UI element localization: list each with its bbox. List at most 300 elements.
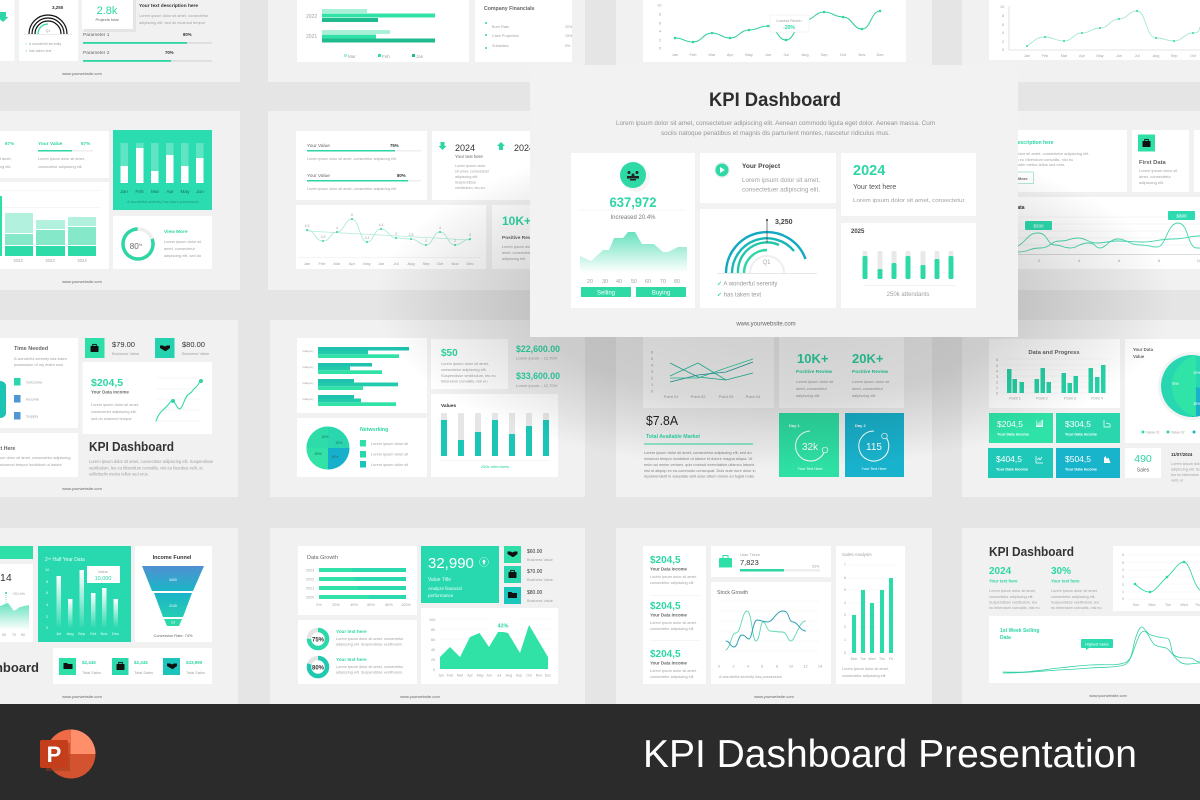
panel: 2025 attendants bars: 250k attendants [887,292,929,298]
panel: main kpi card: 80 [674,279,680,285]
panel: half year teal chart: Aug [66,631,74,636]
slide: row 4 right: eu bibendum convallis, nisi eu [989,606,1040,610]
panel: income list: $204,5 [650,649,681,660]
panel: data growth: 2023 [306,568,314,572]
panel: area chart: 60 [431,638,435,642]
panel: sales analysis: 7 [844,563,846,567]
panel: day 1 tile: Day 1 [789,423,800,428]
panel: income list: Your Data Income [650,612,688,618]
panel: area chart [421,608,558,684]
panel: 2024: 2024 [853,163,885,179]
slide: top row horizontal bars: 15% [565,34,573,38]
slide: row 3 market data [616,320,932,497]
panel: horizontal bar categories: Category [302,381,314,385]
slide: row 4 right: eu bibendum convallis, nisi eu [1051,606,1102,610]
slide: row 4 middle: $70.00 [527,569,543,575]
panel: progress donuts: 80% [312,666,325,672]
panel: user three: 7,823 [740,558,759,567]
slide: top row line chart lowest reach: 8 [659,12,662,16]
slide: row 4 right: Your text here [1051,578,1080,584]
panel: main kpi card [571,153,695,308]
panel: sales analysis: Mon [851,657,857,661]
slide: row 2 middle: Aug [407,261,415,266]
slide: top row left fragment: Lorem ipsum dolor sit amet, consectetur [139,13,209,18]
slide: row 3 left: Lorem ipsum dolor sit amet, consectetur adipiscing elit. Suspendisse [89,459,214,464]
panel: half year teal chart: Half Year Data [51,557,85,563]
slide: row 2 middle: 2024 [455,143,475,153]
panel: income funnel: 13 [171,620,175,624]
slide: top row left fragment: ✓ A wonderful serenity [25,42,61,46]
panel: sales analysis: 5 [844,588,846,592]
panel: teal bar chart card: Jun [196,189,204,195]
slide: row 4 right: KPI Dashboard [989,544,1074,559]
slide: row 2 right: Lorem ipsum dolor sit [1139,168,1178,173]
slide: row 2 middle: 2,8 [409,233,413,237]
panel: line chart sun to thu: 5 [1122,561,1124,565]
slide: top row left fragment: Your text description here [139,3,198,9]
slide: row 2 middle: 2024 [514,143,534,153]
panel: stock growth chart: 4 [747,664,749,668]
panel: half year teal chart: 4 [46,603,48,607]
slide: row 3 left: $204,5 [91,377,123,389]
panel: half year teal chart: Value [98,569,109,574]
slide: row 3 right data and progress: 2 [996,380,998,384]
panel: area chart: Jun [486,674,492,678]
panel: half year teal chart: Nov [100,631,108,636]
slide: row 2 middle: Your text here [455,154,483,159]
slide: row 2 right: 2 [1038,258,1041,263]
slide: row 2 middle: 80% [397,173,406,178]
panel: income tile 204,5 [989,413,1053,443]
panel: half year teal chart: 10,000 [95,576,111,582]
panel: gauge chart: 3,250 [775,219,793,226]
panel: networking pie: 25% [314,452,322,456]
slide: top row line chart lowest reach: Apr [727,52,734,57]
slide: row 4 left: 80 [21,633,25,637]
slide: row 3 left: sollicitudin metus tellus sed eros. [89,472,149,476]
panel: line chart sun to thu [1113,546,1200,611]
slide: row 3 right data and progress: 5 [996,364,998,368]
panel: donut 80 percent card: View More [164,229,188,235]
panel: progress donuts [298,620,417,684]
panel: stock growth chart: A wonderful serenity has possession [719,674,782,679]
slide: row 3 left: Business Value [182,351,210,356]
panel: stock growth chart: 12 [803,664,808,668]
panel: total sales strip: Total Sales [134,670,153,675]
panel: stock growth chart: 0 [718,664,720,668]
slide: top row line chart lowest reach: Feb [690,52,697,57]
slide: row 2 middle: 2 [425,239,427,243]
slide: row 2 left: 2023 [45,258,55,263]
panel: line chart sun to thu: Mon [1148,603,1156,607]
slide: row 3 left: www.yourwebsite.com [62,486,102,491]
slide: row 4 left [0,528,238,704]
panel: sales analysis: Lorem ipsum dolor sit amet, [842,667,889,671]
panel: center slide KPI Dashboard [530,65,1018,337]
slide: top row line chart lowest reach: Mar [709,52,716,57]
slide: row 4 right: 2024 [989,566,1012,577]
subtitle text: sociis natoque penatibus et magnis dis parturient montes, nascetur ridiculus mus. [661,130,890,137]
panel: area chart: 80 [431,628,435,632]
slide: row 2 middle: 75% [390,143,399,148]
slide: row 3 middle: $50 [441,348,458,359]
slide: row 2 middle: 10K+ [502,214,531,228]
slide: row 3 market data: 6 [651,350,654,354]
slide: top row left fragment: Projects total [95,17,119,22]
slide: row 4 right: 30% [1051,566,1071,577]
slide: row 2 right: Lorem ipsum dolor sit amet, consectetur adipiscing elit. [992,151,1089,156]
panel: area chart: Nov [536,674,542,678]
panel: data growth: 2021 [306,586,314,590]
slide: row 4 middle: www.yourwebsite.com [400,694,440,699]
slide: row 3 market data: Point 02 [691,394,706,399]
slide: row 3 right data and progress: Point 3 [1064,396,1076,400]
panel: your project: consectetuer adipiscing elit. [742,188,820,194]
panel: teal bar chart card [113,130,212,210]
panel: day 1 tile [779,413,839,477]
panel: horizontal bar categories: Category [302,365,314,369]
panel: line chart sun to thu: 0 [1122,597,1124,601]
panel: sales analysis: consectetur adipiscing elit [842,674,886,678]
panel: 2024: Your text here [853,184,896,191]
panel: half year teal chart: nd [48,556,51,560]
slide: top row horizontal bars: Jan [416,54,424,59]
slide: row 3 left: $79.00 [112,340,135,349]
subtitle text [616,120,935,137]
slide: row 2 middle: Mar [334,261,341,266]
panel: gauge chart: ✓ A wonderful serenity [717,282,777,288]
panel: line chart sun to thu: Wed [1180,603,1188,607]
panel: income tile 204,5: Your Data Income [997,432,1029,436]
slide: row 2 left: consectetur adipiscing elit. [38,165,83,169]
slide: row 4 right [962,528,1200,704]
slide: row 3 market data: Point 03 [719,394,734,399]
panel: donut 80 percent card [113,216,212,269]
panel: line chart sun to thu: 6 [1122,553,1124,557]
slide: row 3 middle: $22,600.00 [516,344,560,354]
slide: row 3 right data and progress: leo eu bibendum [1171,473,1199,477]
panel: gauge chart [700,209,836,308]
panel: income list: Lorem ipsum dolor sit amet, [650,621,697,625]
slide: top row horizontal bars: 2021 [306,34,317,40]
slide: row 3 right data and progress: 3 [996,375,998,379]
panel: day 1 tile: 32k [802,442,819,453]
panel: income funnel [135,546,212,642]
panel: horizontal bar categories [297,338,427,413]
panel: day 2 tile: Your Text Here [862,467,886,471]
gauge arcs [726,232,806,273]
panel: your data value pie: Value 02 [1171,430,1185,434]
panel: income funnel: 2140 [169,604,177,608]
slide: row 2 middle: Lorem ipsum dolor [455,164,486,168]
panel: half year teal chart: Dec [112,631,119,636]
slide: row 2 left: www.yourwebsite.com [62,279,102,284]
slide: top row horizontal bars: Subsidies [492,44,509,48]
slide: row 3 market data: $7.8A [646,413,678,428]
slide: top row left fragment: adipiscing elit, sed do eiusmod tempor [139,20,206,25]
panel: data growth: 80% [385,603,393,607]
slide: row 3 market data: nisi ut aliquip ex ea commodo consequat. Duis aute irure dolor in [644,468,756,473]
panel: income tile 304,5: $304,5 [1065,419,1091,429]
slide: row 3 right data and progress [962,320,1200,497]
slide: row 3 market data: 2 [651,376,654,380]
panel: your project: Lorem ipsum dolor sit amet, [742,178,820,184]
slide: top row left fragment: Parameter 1 [83,32,110,38]
slide: row 3 middle: Lorem ipsum – 12,70% [516,356,558,360]
panel: progress donuts: Your text here [336,629,367,634]
slide: row 4 middle: $80.00 [527,590,543,596]
slide: top row line chart lowest reach: May [745,52,753,57]
slide: row 3 market data: 4 [651,362,654,368]
panel: data growth: 20% [332,603,340,607]
panel: area chart: 20 [431,658,435,662]
slide: top row line chart lowest reach: Dec [876,52,884,57]
panel: teal bar chart card: Jan [120,189,128,195]
panel: networking pie: Lorem ipsum dolor sit [371,452,409,456]
slide: top row line chart lowest reach: Jul [783,52,789,57]
panel: income list: Lorem ipsum dolor sit amet, [650,575,697,579]
panel: half year teal chart: 2 [45,557,48,563]
slide: row 3 right data and progress: 6 [996,358,998,362]
panel: progress donuts: 75% [312,638,325,644]
slide: top row right line chart: Jun [1116,54,1122,58]
slide: row 3 left: Business Value [112,351,140,356]
slide: top row right line chart: 10 [1000,5,1004,9]
slide: row 3 left: possession of my entire soul [14,362,63,367]
slide: row 4 stock growth: www.yourwebsite.com [754,694,794,699]
panel: data growth [298,546,417,615]
slide: row 3 market data: 10K+ [797,351,829,366]
slide: row 3 middle: Lorem ipsum dolor sit amet, [441,361,489,366]
panel: data growth: 0% [316,603,322,607]
slide: top row horizontal bars: 5% [565,44,571,48]
panel: value title teal card [421,546,499,603]
slide: row 3 right data and progress: adipiscing elit. Su [1171,468,1200,472]
slide: row 2 right: $800 [1176,214,1187,218]
panel: donut 80 percent card: adipiscing elit, sed do [164,253,201,258]
slide: row 2 left: Your Value [38,141,63,147]
slide: top row line chart lowest reach: 4 [659,28,662,34]
panel: main kpi card: Increased 20.4% [610,215,656,221]
slide: row 3 left: Lorem ipsum dolor sit amet, [91,402,139,407]
panel: area chart: Aug [506,674,512,678]
slide: top row line chart lowest reach: Aug [801,52,809,57]
slide: row 2 middle: amet, consectetur [502,251,533,255]
panel: sales analysis: 0 [844,651,846,655]
panel: income tile 404,5: Your Data Income [996,468,1028,472]
slide: row 2 right: 4 [1078,258,1081,263]
slide: row 3 left: vestibulum, leo eu bibendum convallis, nisi eu faucibus velit, or, [89,466,204,470]
slide: row 3 market data: Lorem ipsum dolor sit [796,379,834,384]
panel: donut 80 percent card: 80 [130,242,139,251]
slide: top row line chart lowest reach: -20% [783,25,795,31]
panel: area chart: 100 [429,618,435,622]
panel: networking pie: Lorem ipsum dolor sit [371,441,409,446]
slide: row 3 right data and progress: 1 [996,386,998,390]
panel: main kpi card: 20 [587,279,593,285]
panel: value title teal card: Analyze financial [428,586,462,591]
slide: row 3 right data and progress: 0 [996,392,998,396]
slide: row 3 left: $80.00 [182,340,205,349]
panel: stock growth chart [711,582,831,684]
panel: 2024: Lorem ipsum dolor sit amet, consectetur. [853,198,966,204]
slide: row 2 left: 67% [5,141,14,146]
slide: row 3 left: A wonderful serenity has taken [14,356,67,361]
slide: row 2 right: Bar Data [1004,205,1025,211]
panel: main kpi card: 50 [631,279,637,285]
panel: income tile 304,5 [1056,413,1120,443]
panel: networking pie: 20% [335,441,343,445]
panel: income list [643,546,706,684]
panel: income tile 404,5 [988,448,1053,478]
slide: top row right line chart: Mar [1061,54,1068,58]
panel: day 2 tile: 115 [866,442,882,453]
slide: row 2 middle: Apr [349,261,356,266]
panel: sales analysis: Sales Analysis [842,552,872,557]
panel: data growth: Data Growth [307,555,338,561]
slide: top row right line chart: Sep [1171,54,1177,58]
slide: row 3 market data: 5 [651,356,654,361]
slide: row 2 right: amet, consectetur [1139,174,1171,179]
slide: row 4 middle: Business Value [527,558,553,562]
panel: area chart: Jul [497,674,501,678]
slide: row 2 right: 8 [1158,258,1161,263]
slide: top row left fragment: Parameter 2 [83,50,110,56]
slide: top row right line chart [962,0,1200,82]
slide: row 3 middle: Suspendisse vestibulum, leo eu [441,373,496,378]
panel: area chart: May [477,674,484,678]
panel: area chart: Oct [526,674,532,678]
slide: row 2 left: 2024 [77,258,87,263]
panel: networking pie: Networking [360,427,388,433]
panel: your data value pie: Value [1133,354,1145,359]
slide: top row left fragment: 70% [165,50,174,55]
panel: main kpi card: 70 [660,279,666,285]
button: buying [636,287,686,297]
button: buying: Buying [652,290,670,296]
panel: progress donuts: adipiscing elit. Suspendisse vestibulum. [336,670,403,674]
panel: half year teal chart: Sep [78,631,86,636]
panel: 2025 attendants bars: 2025 [851,229,865,235]
slide: row 4 left: www.yourwebsite.com [62,694,102,699]
slide: row 4 left: +20.4% [12,592,26,596]
slide: top row left fragment: 3,250 [52,5,64,10]
panel: your project: Your Project [742,163,781,170]
panel: area chart: 40 [431,648,435,652]
slide: row 3 market data: reprehenderit in voluptate velit esse cillum dolore eu fugiat nulla [644,474,754,478]
panel: stock growth chart: 6 [761,664,763,668]
panel: income tile 504,5: Your Data Income [1065,468,1097,472]
panel: teal bar chart card: Apr [166,189,174,195]
panel: income tile 204,5: $204,5 [997,419,1023,429]
footer url: www.yourwebsite.com [735,322,796,328]
panel: total sales strip: Total Sales [186,670,205,675]
area chart [580,232,687,273]
slide: row 2 middle: Jul [393,261,399,266]
slide: row 3 right data and progress: Point 1 [1009,396,1021,400]
slide: row 2 middle: 2,5 [321,235,325,239]
slide: row 3 left: consectetur adipiscing elit, [91,409,137,414]
slide: row 2 middle: Suspendisse [455,180,476,184]
slide: row 3 market data: 20K+ [852,351,884,366]
slide: row 4 middle [270,528,585,704]
slide: row 4 left: 14 [0,572,12,584]
slide: row 2 left: 67% [81,141,90,146]
slide: top row right line chart: Jan [1024,54,1030,58]
panel: sales analysis: 2 [844,625,846,629]
panel: gauge chart: Q1 [762,260,771,266]
slide: row 3 market data: Lorem ipsum dolor sit amet, consectetur adipiscing elit, sed do [644,450,751,455]
slide: row 4 right: consectetur adipiscing elit. [989,595,1034,599]
panel: sales analysis: 1 [844,638,846,642]
slide: row 2 right: $500 [1033,224,1044,228]
slide: top row right line chart: Jul [1135,54,1140,58]
panel: 2025 attendants bars [841,223,976,308]
slide: row 2 middle: sit amet, consectetur [455,170,490,174]
slide: row 2 middle: vestibulum, leo eu [455,186,485,190]
slide: row 2 middle: Oct [437,261,444,266]
slide: top row right line chart: Oct [1190,54,1197,58]
slide: row 2 right [962,111,1200,290]
slide: row 3 left: um dolor sit amet, consectetur adipiscing [0,455,70,460]
slide: top row horizontal bars: Cash Projection [492,34,519,38]
slide: top row left fragment: 80% [183,32,192,37]
panel: area chart: Jan [438,674,444,678]
panel: area chart: Mar [457,674,464,678]
slide: top row horizontal bars: Company Financials [484,6,535,12]
slide: row 2 middle: 2,4 [365,236,369,240]
slide: top row line chart lowest reach: Nov [858,52,866,57]
slide: row 3 right data and progress: 11/07/2024 [1171,452,1193,457]
panel: sales analysis: 3 [844,613,846,617]
big number: 637,972 [610,195,656,210]
panel: gauge chart: ✓ has taken text [717,292,761,298]
slide: top row line chart lowest reach: 2 [659,38,662,42]
panel: sales analysis: Thu [879,657,885,661]
panel: first week selling data [989,616,1200,683]
panel: your data value pie: 75% [1171,382,1179,386]
panel: area chart: Apr [467,674,474,678]
slide: row 3 market data: enim ad minim veniam, quis nostrud exercitation ullamco laboris [644,462,754,467]
panel: line chart sun to thu: Tue [1165,603,1171,607]
panel: income funnel: 3400 [169,578,177,582]
panel: total sales strip: Total Sales [82,670,101,675]
panel: user three [711,546,831,577]
slide: row 3 market data: Positive Review [796,369,833,375]
panel: sales analysis [836,546,905,684]
icon: people group [620,162,646,188]
panel: line chart sun to thu: 1 [1122,590,1124,594]
panel: your data value pie [1125,339,1200,443]
slide: row 2 middle: May [363,261,371,266]
slide: top row right line chart: 8 [1002,14,1004,18]
slide: row 3 middle: $33,600.00 [516,371,560,381]
slide: top row left fragment: www.yourwebsite.com [62,71,102,76]
panel: 2024 [841,153,976,216]
panel: half year teal chart: Jul [56,631,61,636]
panel: donut 80 percent card: % [139,242,143,247]
panel: line chart sun to thu: Sun [1133,603,1139,607]
slide: row 2 right: Your text description here [992,140,1054,146]
panel: income tile 504,5: $504,5 [1065,454,1091,464]
slide: top row right line chart: 4 [1002,31,1004,35]
slide: top row right line chart: 2 [1002,40,1004,44]
slide: row 3 market data: amet, consectetur [796,386,828,391]
panel: half year teal chart: 2 [46,615,48,619]
panel: total sales strip: $2,445 [134,660,148,665]
slide: row 3 market data: Point 01 [664,394,679,399]
slide: row 3 market data: adipiscing elit. [796,393,820,398]
